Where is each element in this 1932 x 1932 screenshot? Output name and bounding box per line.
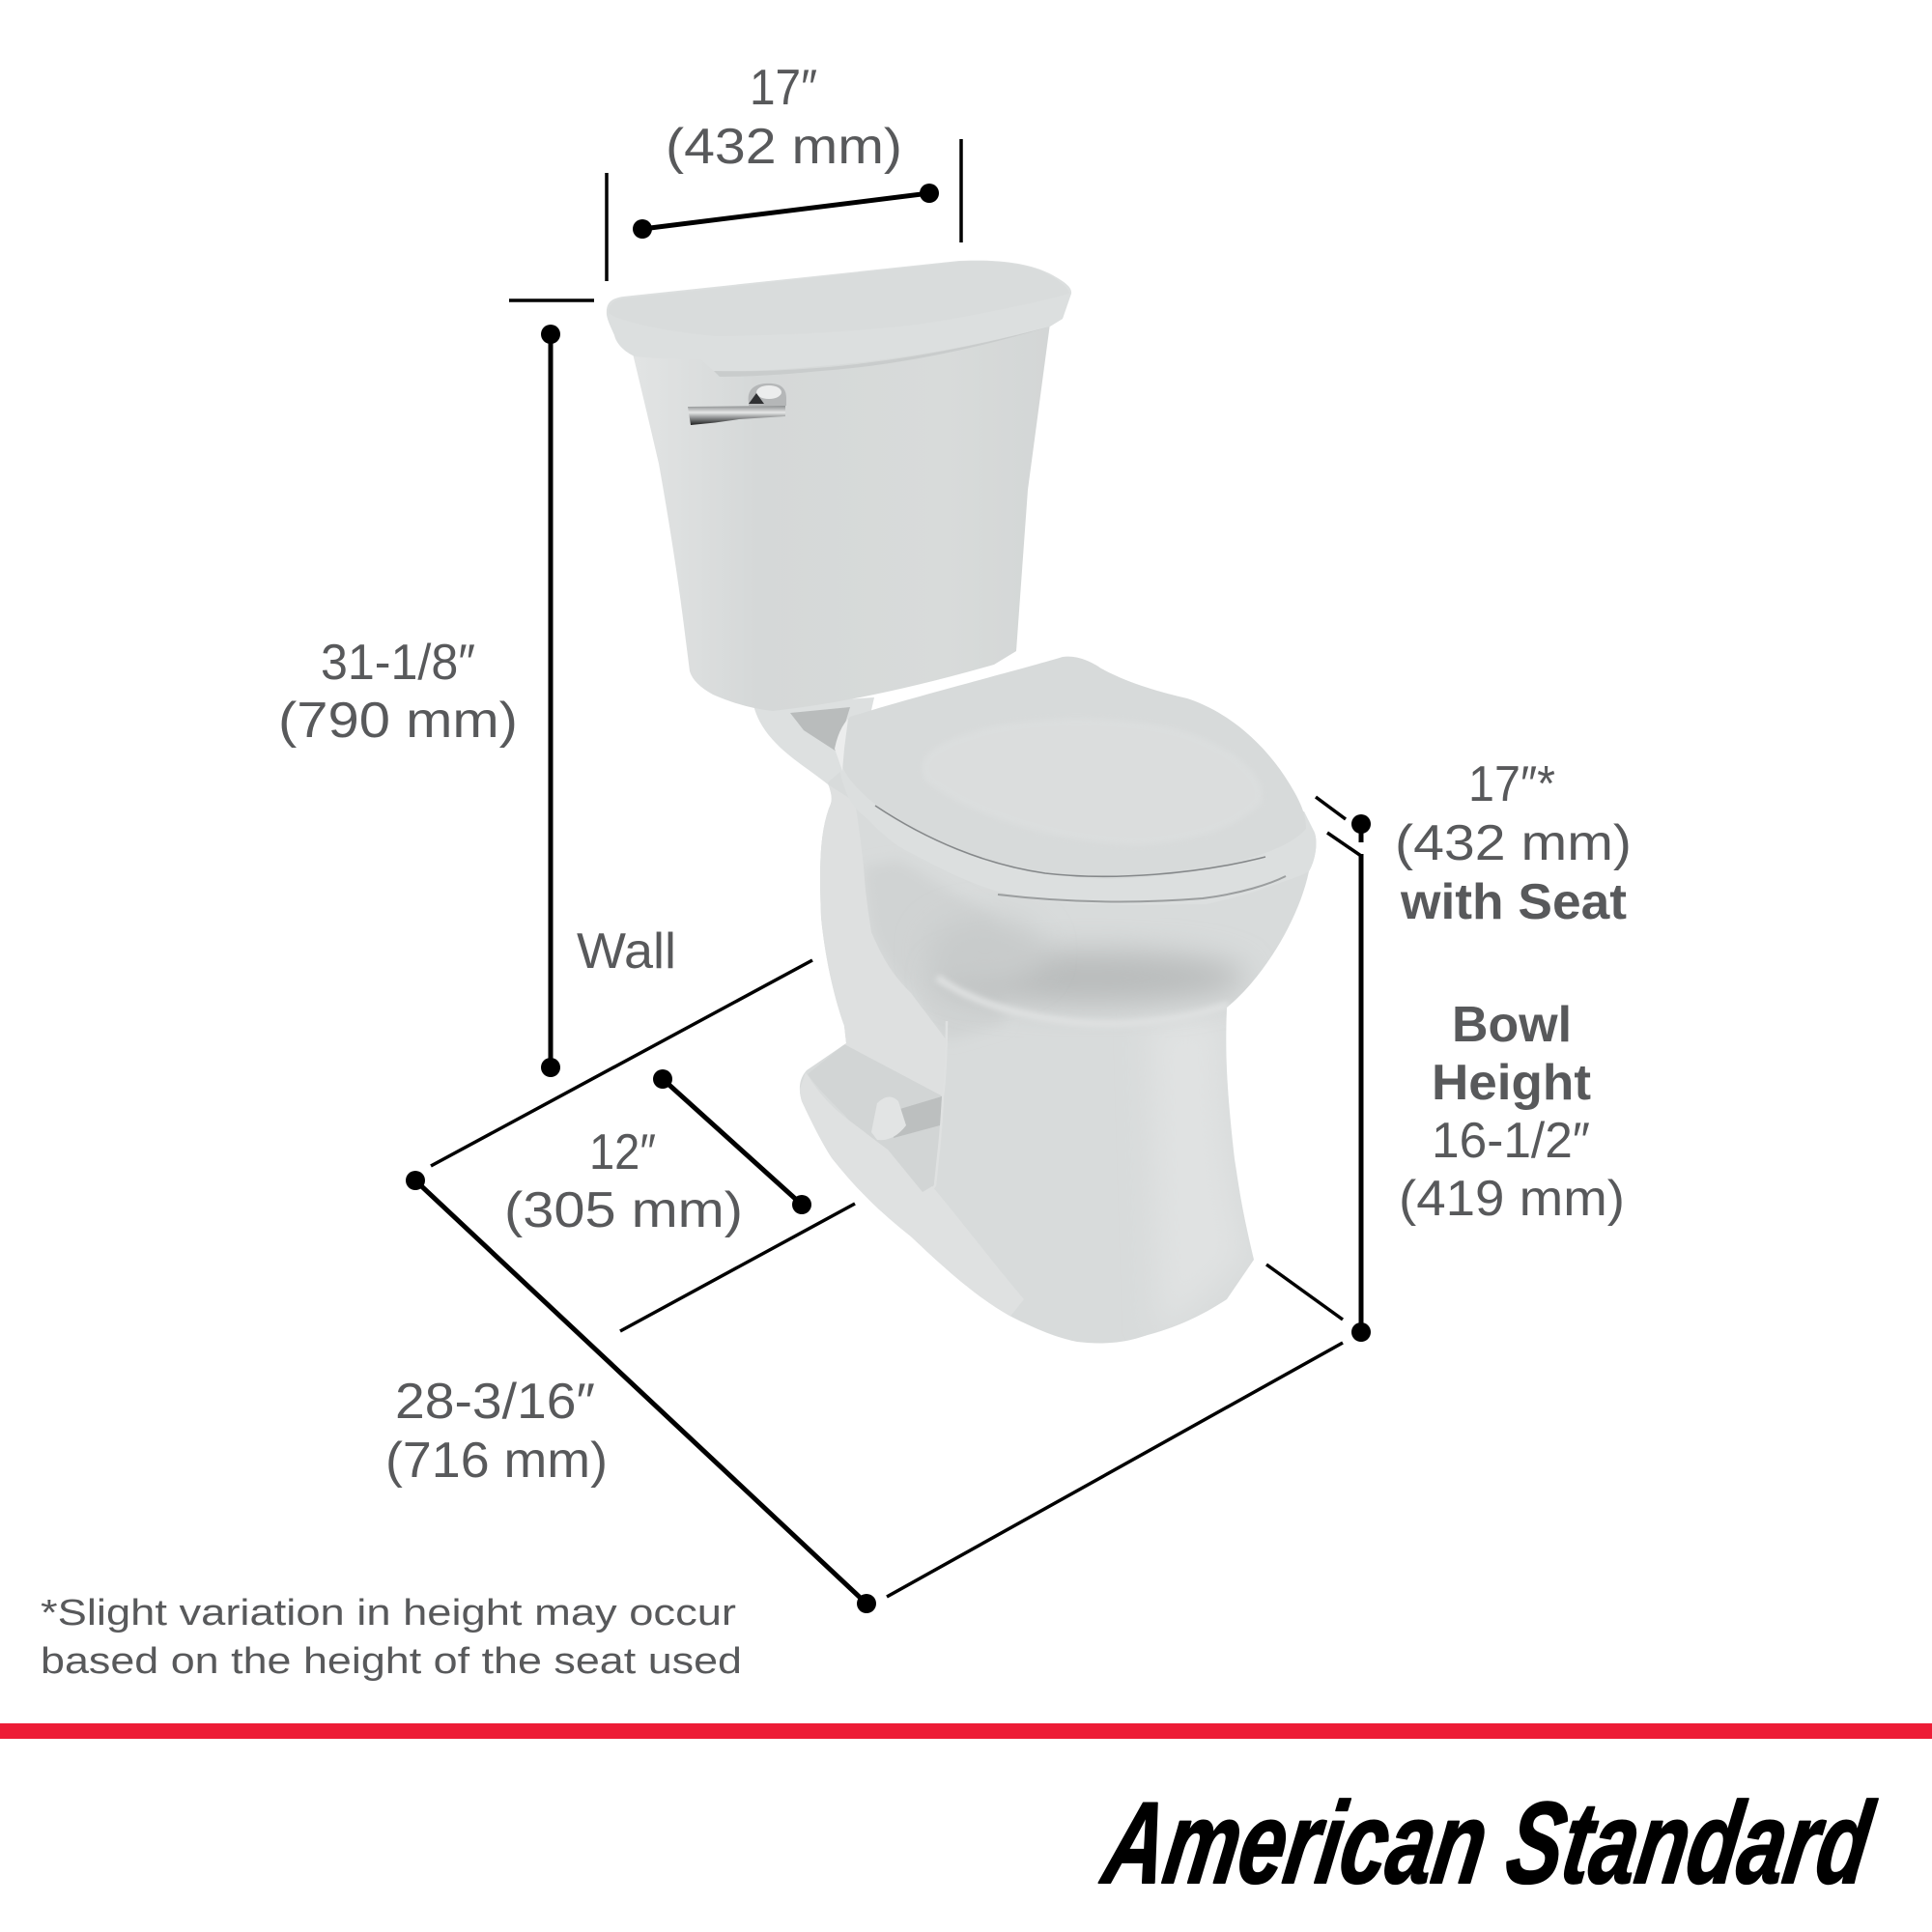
endpoint bottom [541, 1058, 560, 1077]
label: 31-1/8″ [321, 635, 475, 691]
endpoint seat [1351, 814, 1371, 834]
label seat metric: (432 mm) [1395, 815, 1632, 871]
foot front band [849, 1121, 932, 1194]
under-bowl zone [864, 860, 1005, 1040]
endpoint left [633, 219, 652, 239]
endpoint floor [1351, 1322, 1371, 1342]
flush handle [688, 384, 786, 425]
tick: tank right [959, 139, 963, 242]
seat gap line [875, 806, 1265, 876]
lid top surface [609, 262, 1069, 336]
rim line [998, 876, 1286, 901]
tick seat top [1316, 797, 1346, 819]
tick wall [431, 960, 812, 1166]
endpoint right [920, 184, 939, 203]
lid shadow edge [714, 327, 1050, 377]
measure line [663, 1079, 802, 1205]
tick bowl top [1327, 833, 1361, 856]
label bowl metric: (419 mm) [1399, 1171, 1625, 1227]
pedestal light band [1186, 1056, 1187, 1057]
hinge [835, 719, 848, 771]
endpoint top [541, 325, 560, 344]
label metric: (305 mm) [504, 1182, 743, 1238]
tank body [633, 324, 1050, 711]
neck recess [790, 707, 850, 752]
tank lid [607, 261, 1071, 371]
label bowl: Bowl [1452, 997, 1572, 1053]
dark underside of bowl [937, 951, 1246, 1005]
label height: Height [1432, 1055, 1591, 1111]
label: wall: Wall [577, 923, 676, 980]
foot top [842, 1044, 844, 1046]
tick drain [620, 1204, 855, 1331]
label: 28-3/16″ [395, 1374, 595, 1430]
measure line [415, 1180, 867, 1604]
measure line [642, 193, 929, 229]
endpoint wall [653, 1069, 672, 1089]
endpoint back [406, 1171, 425, 1190]
dimension: total height [278, 300, 594, 1077]
label: 17″ [750, 60, 817, 116]
label metric: (790 mm) [278, 693, 518, 749]
dimension: seat and bowl height [1266, 756, 1632, 1342]
bowl and pedestal silhouette [800, 763, 1316, 1343]
dimension: rough-in [431, 960, 855, 1331]
dimension: tank width [607, 60, 961, 281]
red divider bar [0, 1723, 1932, 1739]
side wall edge [933, 1021, 948, 1186]
label bowl height: 16-1/2″ [1432, 1113, 1590, 1169]
bolt cap [871, 1096, 942, 1140]
bowl ridge highlight [937, 978, 1229, 1024]
tick top [509, 298, 594, 302]
measure line upper [1358, 824, 1364, 842]
back ridge [862, 868, 945, 1039]
endpoint drain [792, 1195, 811, 1214]
measure line [549, 334, 553, 1067]
tick: tank left [605, 173, 609, 281]
footnote line 1: *Slight variation in height may occur [41, 1593, 736, 1634]
label: 12″ [589, 1124, 656, 1180]
seat lid [840, 657, 1306, 879]
rim [840, 763, 1316, 905]
tick floor [1266, 1264, 1343, 1320]
bowl shading [792, 784, 1246, 1338]
mid shade of bowl [989, 920, 1025, 974]
footnote [41, 1593, 742, 1682]
measure line lower [1358, 854, 1364, 1332]
tick front [887, 1343, 1343, 1597]
label metric: (432 mm) [666, 119, 902, 175]
label seat height: 17″* [1468, 756, 1555, 812]
seat lid recess [922, 719, 1263, 845]
dimension: depth [385, 1171, 1343, 1613]
toilet illustration [607, 261, 1316, 1343]
label with seat: with Seat [1400, 874, 1627, 930]
footnote line 2: based on the height of the seat used [41, 1641, 742, 1682]
label metric: (716 mm) [385, 1433, 608, 1489]
toilet neck [753, 697, 874, 804]
endpoint front [857, 1594, 876, 1613]
